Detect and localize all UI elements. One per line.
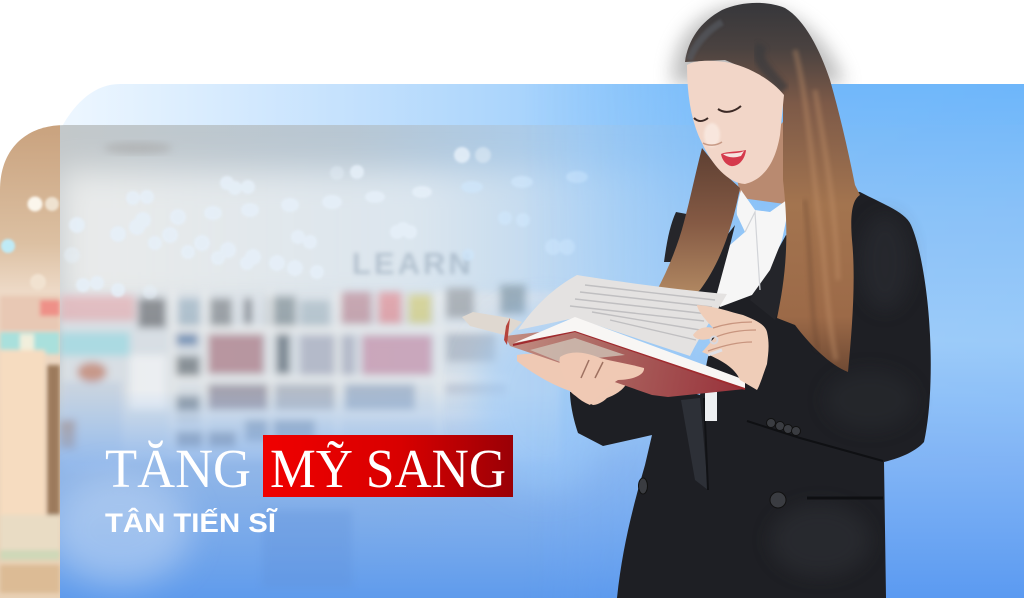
face (687, 61, 784, 184)
bokeh ceiling lights (64, 147, 491, 299)
background blue panel (63, 84, 1024, 125)
blurred LEARN sign: LEARN (352, 246, 474, 281)
cover art (530, 338, 625, 362)
left hand (517, 354, 643, 405)
left flap pages (462, 312, 522, 336)
blurred table shapes (266, 513, 348, 536)
subtitle: TÂN TIẾN SĨ (105, 507, 278, 538)
page thickness band (514, 317, 745, 388)
left hand fingers (559, 353, 644, 405)
shirt (705, 190, 791, 421)
ceiling vent (104, 142, 172, 154)
book cover (505, 328, 745, 397)
photo overlay: tinted store interior (60, 125, 692, 598)
given name: MỸ SANG (270, 438, 506, 499)
title (105, 435, 513, 499)
photo: woman reading a book (462, 3, 931, 598)
jacket buttons (638, 418, 800, 508)
bottom blue fade (60, 398, 650, 598)
book (462, 275, 745, 397)
family name: TĂNG (105, 438, 251, 499)
head shadow on white (672, 6, 845, 84)
hair (656, 3, 860, 372)
neck (735, 120, 792, 205)
name highlight box (263, 435, 513, 497)
panel: blurred bookstore photo (0, 125, 692, 598)
right hand (693, 305, 769, 390)
jacket (570, 190, 931, 598)
photo strip: warm left edge (0, 120, 60, 598)
bookshelves (60, 285, 560, 472)
open pages (518, 275, 727, 356)
